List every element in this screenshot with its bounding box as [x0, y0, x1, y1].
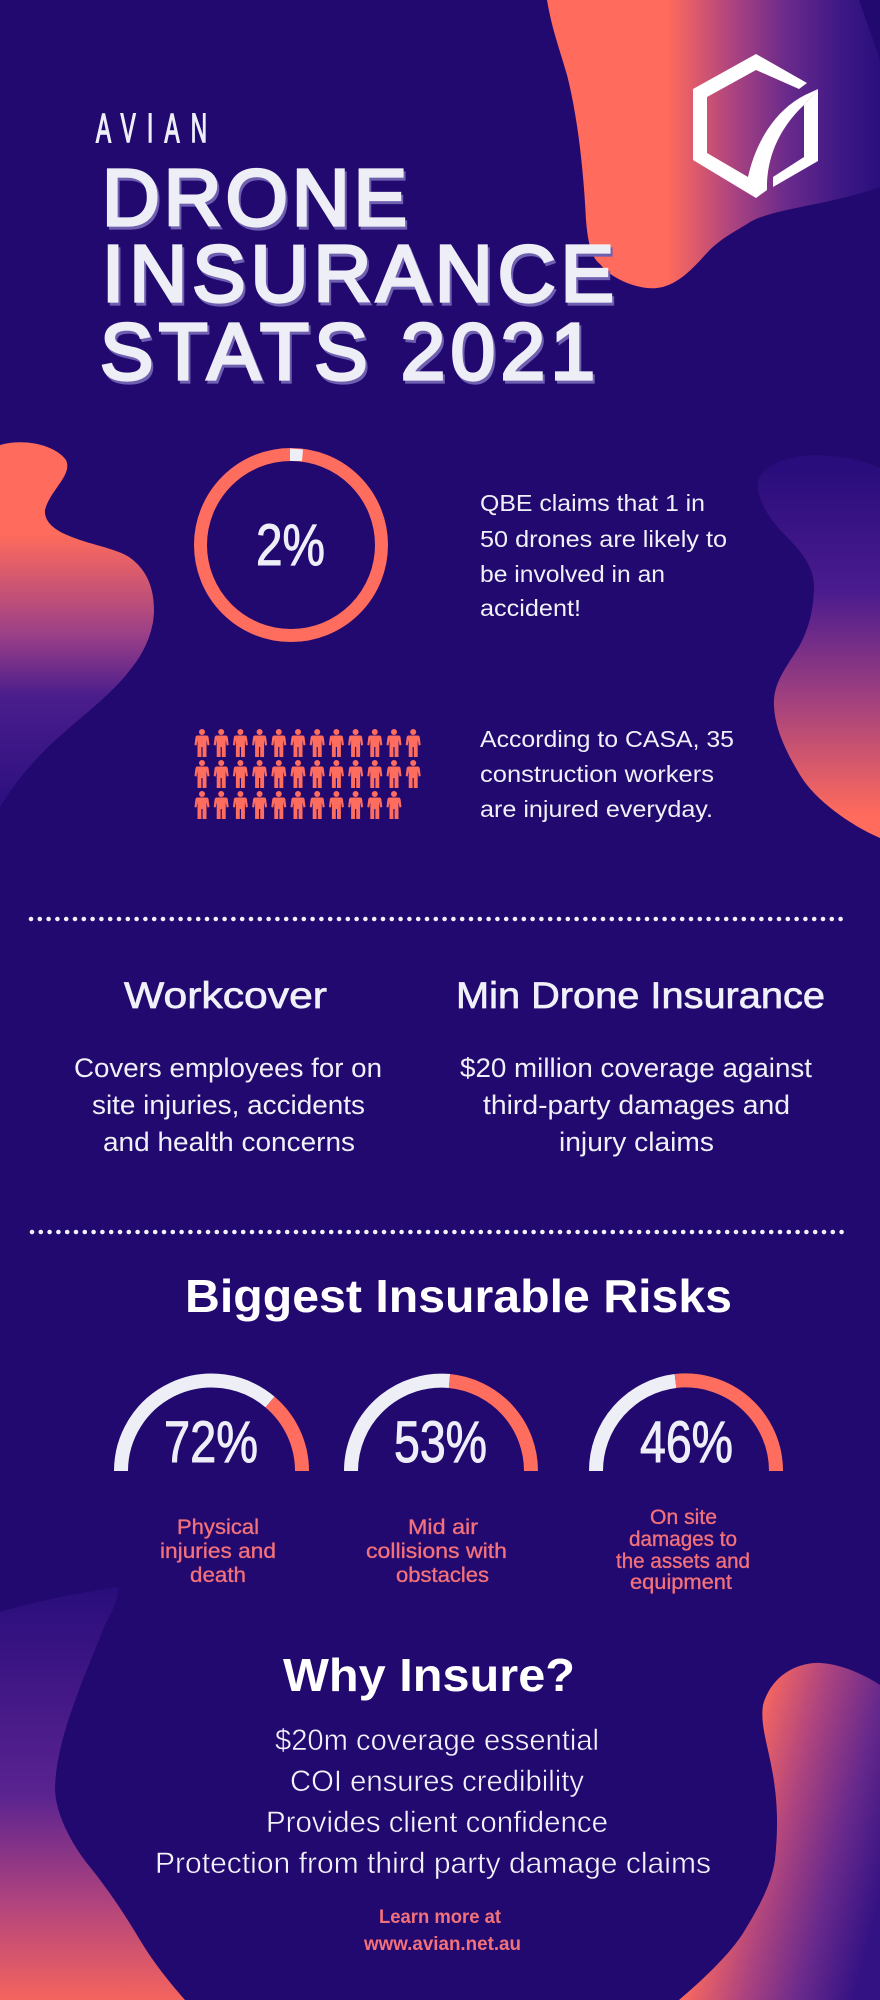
heading: Biggest Insurable Risks: Biggest Insurable Risks: [185, 1270, 732, 1322]
label: mid air collisions: obstacles: [396, 1564, 489, 1587]
title: DRONE: [102, 153, 407, 242]
text: QBE claim: QBE claims that 1 in: [480, 490, 705, 516]
text: CASA statistic: [480, 726, 734, 822]
text: insurance description: third-party damages and: [483, 1090, 790, 1120]
gauge: 53%: 53%: [394, 1410, 487, 1475]
heading: Min Drone Insurance: Min Drone Insurance: [456, 975, 825, 1016]
label: physical injuries: injuries and: [160, 1540, 276, 1563]
text: Workcover description: Covers employees for on: [74, 1053, 382, 1083]
label: mid air collisions: [366, 1516, 507, 1587]
heading: Why Insure?: Why Insure?: [283, 1649, 575, 1701]
text: insurance description: injury claims: [559, 1127, 714, 1157]
call to action: www.avian.net.au: [363, 1934, 521, 1955]
text: Workcover description: [74, 1053, 382, 1157]
title: INSURANCE: [102, 229, 614, 318]
call to action: [363, 1907, 521, 1955]
text: QBE claim: be involved in an: [480, 561, 665, 587]
label: on site damages: the assets and: [616, 1550, 750, 1573]
blob: bottom right: [679, 1663, 880, 2000]
gauge: 72%: [121, 1381, 302, 1475]
pictogram: people: [194, 729, 421, 819]
brand name: AVIAN: [96, 106, 218, 152]
blob: top right: [547, 0, 880, 288]
heading: Workcover: Workcover: [124, 975, 327, 1016]
text: reasons to insure: Provides client confidence: [266, 1806, 608, 1839]
label: physical injuries: Physical: [177, 1516, 259, 1539]
text: insurance description: $20 million coverage against: [460, 1053, 813, 1083]
label: physical injuries: [160, 1516, 276, 1587]
blob: middle left: [0, 442, 154, 807]
text: QBE claim: accident!: [480, 595, 581, 621]
text: CASA statistic: are injured everyday.: [480, 796, 713, 822]
blob: bottom left: [0, 1587, 185, 2000]
gauge: 46%: [596, 1380, 776, 1475]
panel: Workcover: [74, 975, 382, 1157]
donut chart: 2%: [200, 448, 382, 636]
label: on site damages: On site: [650, 1506, 717, 1529]
panel: Min Drone Insurance: [456, 975, 825, 1157]
gauge: 46%: 46%: [640, 1410, 733, 1475]
gauge: 72%: 72%: [164, 1410, 258, 1475]
logo: [693, 54, 818, 198]
text: insurance description: [460, 1053, 813, 1157]
text: reasons to insure: [155, 1724, 711, 1880]
label: mid air collisions: Mid air: [408, 1516, 478, 1539]
label: mid air collisions: collisions with: [366, 1540, 507, 1563]
text: Workcover description: site injuries, accidents: [92, 1090, 365, 1120]
title: [100, 153, 614, 396]
text: QBE claim: [480, 490, 727, 621]
title: STATS 2021: [100, 307, 595, 396]
label: on site damages: [616, 1506, 750, 1594]
text: reasons to insure: $20m coverage essential: [275, 1724, 599, 1757]
donut chart: 2%: 2%: [256, 513, 325, 578]
text: CASA statistic: construction workers: [480, 761, 714, 787]
gauge: 53%: [351, 1381, 531, 1475]
label: on site damages: equipment: [630, 1571, 732, 1594]
text: Workcover description: and health concerns: [103, 1127, 355, 1157]
text: CASA statistic: According to CASA, 35: [480, 726, 734, 752]
blob: middle right: [758, 455, 880, 838]
label: physical injuries: death: [190, 1564, 246, 1587]
text: reasons to insure: COI ensures credibility: [290, 1765, 584, 1798]
label: on site damages: damages to: [629, 1528, 737, 1551]
text: reasons to insure: Protection from third party damage claims: [155, 1847, 711, 1880]
call to action: Learn more at: [379, 1907, 502, 1928]
text: QBE claim: 50 drones are likely to: [480, 526, 727, 552]
